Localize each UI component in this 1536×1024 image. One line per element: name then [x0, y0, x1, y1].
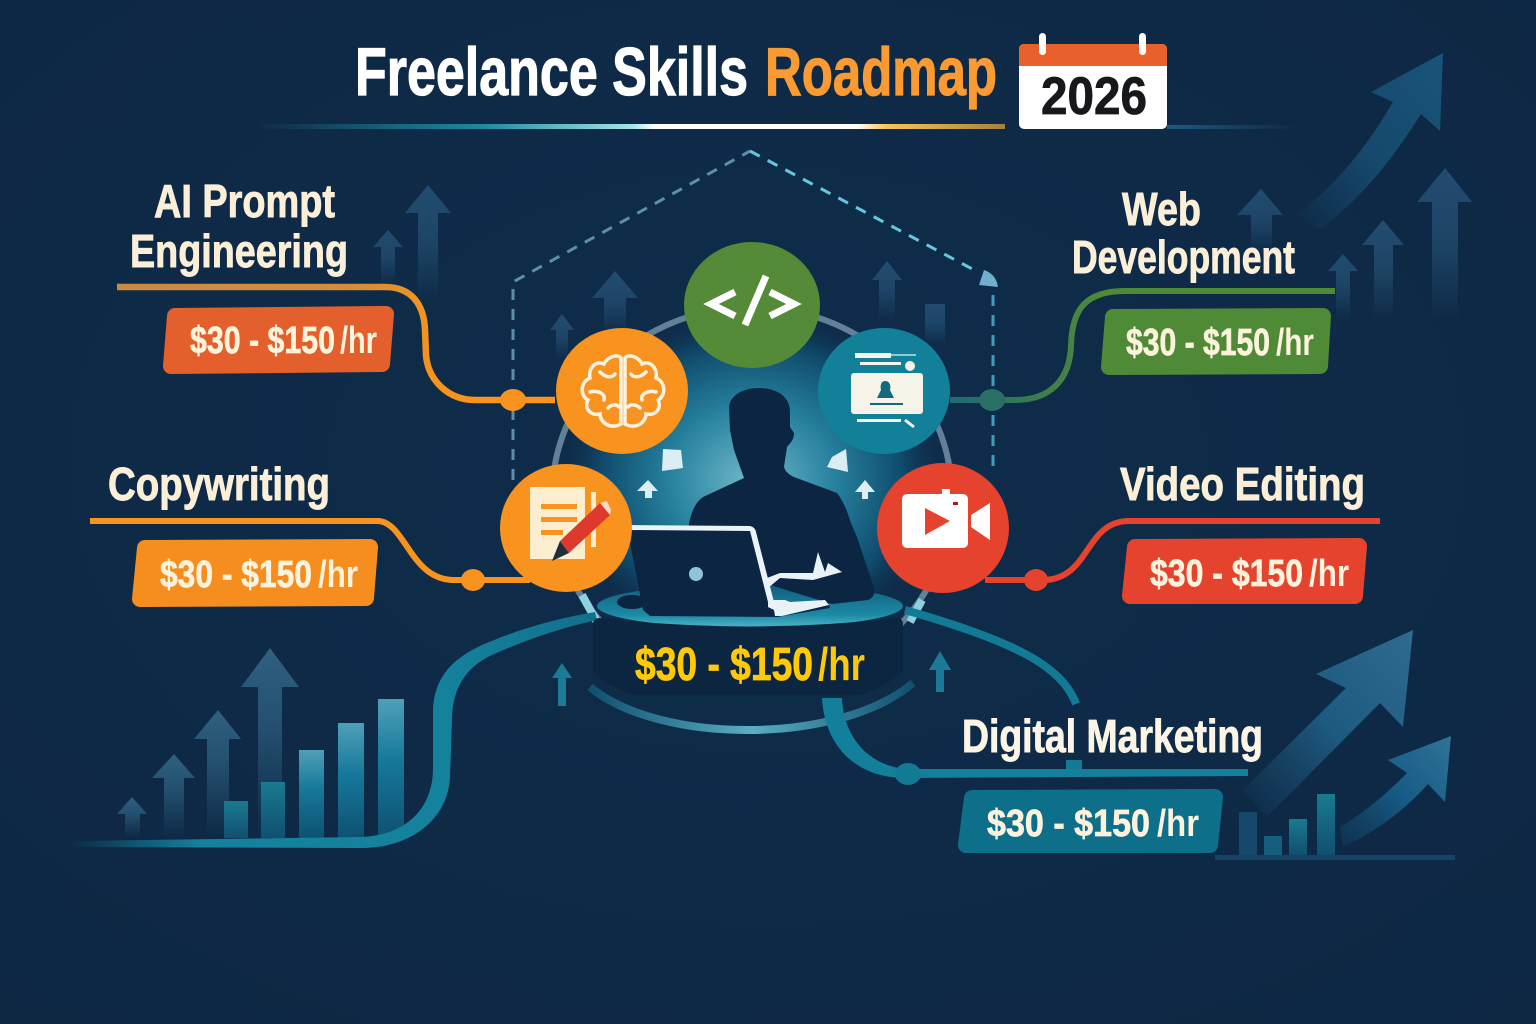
skill: Digital Marketing: $30 - $150	[987, 803, 1150, 845]
icon: brain	[556, 328, 688, 454]
icon: video camera	[877, 463, 1009, 593]
lower arc	[590, 683, 913, 730]
connector: AI Prompt Engineering	[117, 287, 555, 411]
calendar badge	[1019, 33, 1167, 129]
icon: web page	[818, 328, 950, 454]
small arrows around price	[552, 651, 951, 706]
teal arc left	[70, 612, 597, 848]
central ring	[552, 307, 952, 687]
connector: Copywriting	[90, 521, 530, 591]
skill: Web Development: Development	[1072, 231, 1295, 283]
skill: AI Prompt Engineering: /hr	[340, 320, 377, 362]
skill: Web Development: $30 - $150	[1126, 322, 1270, 364]
skill: Digital Marketing	[962, 710, 1263, 845]
glow behind person	[562, 310, 942, 650]
central price: $30 - $150	[635, 638, 813, 690]
paper shapes and arrows near person	[637, 449, 875, 499]
skill: Video Editing: Video Editing	[1120, 458, 1365, 510]
skill: Web Development: /hr	[1276, 322, 1314, 364]
connector: Digital Marketing	[822, 698, 1248, 785]
ring light ends	[582, 595, 922, 622]
skill: Web Development: Web	[1122, 183, 1201, 235]
skill: Video Editing: /hr	[1309, 553, 1349, 595]
skill: AI Prompt Engineering: $30 - $150	[190, 320, 335, 362]
person silhouette	[689, 388, 874, 604]
bar chart with arrows: bottom left	[117, 648, 404, 838]
skill: Video Editing	[1120, 458, 1365, 596]
connector: Web Development	[950, 291, 1335, 411]
skill: Copywriting: /hr	[318, 554, 358, 596]
skill: Copywriting: $30 - $150	[160, 554, 312, 596]
title underline	[260, 124, 1295, 129]
skill: Web Development	[1072, 183, 1323, 367]
title: Roadmap	[765, 34, 997, 110]
title: Freelance Skills	[355, 34, 748, 110]
background arrows: top left	[373, 185, 945, 360]
skill: AI Prompt Engineering: AI Prompt	[154, 175, 335, 227]
connector: Video Editing	[985, 521, 1380, 591]
skill: Video Editing: $30 - $150	[1150, 553, 1303, 595]
calendar badge: 2026	[1041, 67, 1147, 126]
price band	[593, 618, 903, 695]
background arrows: top right	[1237, 53, 1472, 320]
skill: AI Prompt Engineering: Engineering	[130, 225, 348, 277]
skill: Digital Marketing: Digital Marketing	[962, 710, 1263, 762]
icon: document and pencil	[500, 464, 632, 592]
icon: code	[684, 242, 820, 368]
skill: Digital Marketing: /hr	[1157, 803, 1199, 845]
skill: Copywriting	[108, 458, 370, 599]
platform under laptop	[597, 584, 903, 628]
skill: Copywriting: Copywriting	[108, 458, 330, 510]
bar chart with arrows: bottom right	[1215, 630, 1455, 860]
central price: /hr	[818, 638, 865, 690]
dashed roadmap outline	[513, 151, 998, 480]
skill: AI Prompt Engineering	[130, 175, 386, 366]
teal arc right	[905, 610, 1076, 704]
laptop	[627, 525, 842, 617]
teal arc stub	[1066, 760, 1082, 770]
